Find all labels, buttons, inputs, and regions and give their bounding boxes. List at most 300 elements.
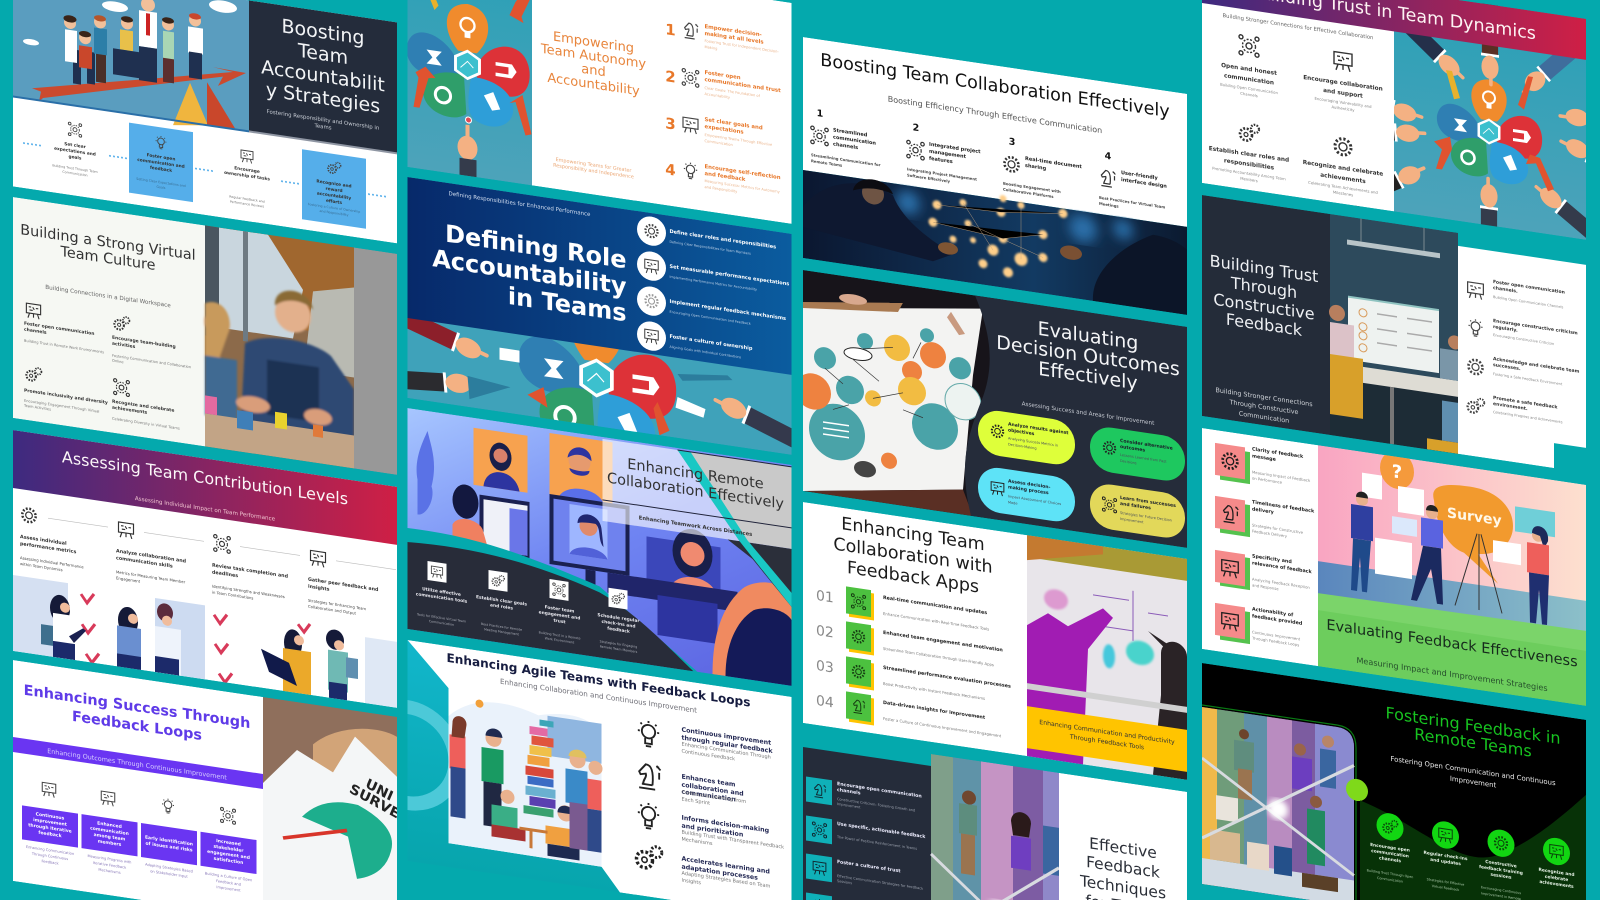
benefit list: Accelerates learning and bbox=[682, 856, 770, 876]
dark title panel bbox=[249, 0, 397, 153]
benefit cards: engagement and bbox=[207, 849, 250, 861]
numbered items: Best Practices for Virtual Team bbox=[1099, 195, 1165, 210]
timeline steps: in Team Contributions bbox=[212, 589, 253, 601]
heading: Team Culture bbox=[60, 244, 156, 274]
heading: Enhancing Success Through bbox=[24, 683, 250, 732]
benefit cards: Feedback bbox=[41, 859, 59, 866]
numbered list: Boost Productivity with Instant Feedback Mechanisms bbox=[883, 681, 985, 701]
responsibility list: Foster a culture of ownership bbox=[670, 334, 753, 352]
subtitle: Improvement bbox=[1450, 775, 1496, 790]
2x2 items: Encouraging Vulnerability and bbox=[1314, 96, 1372, 109]
numbered list: Enhance Communication with Real-Time Feedback Tools bbox=[883, 611, 989, 632]
numbered list: Encourage self-reflection bbox=[704, 164, 781, 181]
right white panel bbox=[1458, 246, 1586, 473]
2x2 items: responsibilities bbox=[1224, 158, 1275, 172]
item list: Promote a safe feedback bbox=[1493, 395, 1558, 411]
strategy items: communication tools bbox=[416, 591, 468, 605]
panel: Boosting Team Collaboration Effectively bbox=[803, 37, 1187, 315]
timeline steps: Assessing Individual Performance bbox=[20, 555, 84, 570]
benefit cards: feedback bbox=[38, 830, 63, 839]
2x2 items: Authenticity bbox=[1331, 104, 1355, 113]
numbered list: 01 bbox=[816, 588, 834, 607]
strategy items: Establish clear goals bbox=[476, 594, 527, 608]
accent ball bbox=[1346, 777, 1368, 803]
subtitle: Responsibility and Independence bbox=[553, 163, 634, 180]
feature grid: Celebrating Diversity in Virtual Teams bbox=[112, 417, 180, 431]
subtitle: Fostering Open Communication and Continuous bbox=[1390, 755, 1556, 787]
numbered items: 2 bbox=[913, 122, 919, 134]
feature list: Actionability of bbox=[1252, 606, 1294, 619]
feedback circles: Encouraging Continuous bbox=[1481, 885, 1521, 895]
numbered list: Streamlined performance evaluation processes bbox=[883, 665, 1011, 690]
heading: Collaboration Effectively bbox=[607, 470, 784, 513]
subtitle band bbox=[13, 737, 263, 789]
benefit cards: Enhancing Communication bbox=[26, 845, 74, 856]
feedback circles: communication bbox=[1371, 848, 1409, 860]
numbered list bbox=[665, 18, 781, 200]
benefit cards: Measuring Progress with bbox=[88, 854, 131, 865]
item list: successes. bbox=[1493, 363, 1521, 372]
responsibility list: Implement regular feedback mechanisms bbox=[670, 299, 786, 322]
outcome pills: Analyze results against bbox=[1008, 421, 1069, 436]
2x2 items: Open and honest bbox=[1221, 63, 1277, 77]
item list: regularly. bbox=[1493, 324, 1518, 334]
heading: Constructive bbox=[1213, 290, 1315, 324]
heading: Effective bbox=[1089, 834, 1157, 862]
process steps: Set clear bbox=[64, 141, 87, 150]
process steps: Communication bbox=[62, 170, 88, 178]
feedback circles: channels bbox=[1379, 855, 1401, 864]
benefit list: and prioritization bbox=[682, 823, 744, 839]
image: glowing network bbox=[803, 166, 1187, 315]
feature list: delivery bbox=[1252, 506, 1275, 516]
feedback circles: Building Trust Through Open bbox=[1367, 868, 1413, 879]
numbered list: 04 bbox=[816, 693, 834, 712]
right dark corner bbox=[728, 539, 792, 607]
benefit cards: Continuous bbox=[36, 811, 65, 822]
process steps: Performance Reviews bbox=[230, 200, 264, 209]
panel: Building Trust in Team Dynamics bbox=[1202, 0, 1600, 284]
numbered items: Streamlined bbox=[833, 127, 868, 139]
feature list: relevance of feedback bbox=[1252, 560, 1313, 575]
image: whiteboard silhouettes bbox=[1027, 535, 1187, 780]
feature grid bbox=[23, 302, 191, 432]
subtitle: Measuring Impact and Improvement Strategies bbox=[1356, 655, 1548, 693]
illustration: survey team: Survey bbox=[1447, 505, 1502, 529]
panel: Enhancing Team Collaboration with Feedback Apps bbox=[803, 502, 1187, 780]
benefit cards: among team bbox=[94, 832, 126, 843]
2x2 items: communication bbox=[1224, 73, 1274, 87]
benefit cards: members bbox=[98, 839, 122, 848]
numbered items: 1 bbox=[817, 108, 823, 120]
dark title panel bbox=[1202, 195, 1330, 435]
feature grid: Encouraging Engagement Through Virtual bbox=[24, 399, 99, 414]
feedback circles: and updates bbox=[1430, 857, 1461, 867]
outcome pills: Consider alternative bbox=[1120, 438, 1173, 452]
header band bbox=[13, 430, 397, 545]
timeline steps: Strategies for Enhancing Team bbox=[308, 598, 366, 611]
teal backdrop with ring bbox=[360, 633, 792, 900]
timeline steps: within Team Dynamics bbox=[20, 561, 63, 572]
strategy items: check-ins and bbox=[601, 619, 636, 630]
illustration: video call bbox=[408, 408, 792, 686]
numbered items: Remote Teams bbox=[811, 158, 843, 168]
numbered items: 3 bbox=[1009, 136, 1015, 148]
feature list bbox=[1215, 441, 1315, 654]
heading: Boosting bbox=[282, 14, 364, 49]
feedback circles: celebrate bbox=[1545, 874, 1568, 883]
heading: Collaboration with bbox=[833, 535, 993, 578]
teal swoosh bbox=[408, 528, 698, 672]
white panel bbox=[532, 0, 792, 224]
heading: Building Trust bbox=[1210, 251, 1318, 286]
process steps: Building Trust Through Team bbox=[52, 163, 98, 174]
timeline steps: Assess individual bbox=[20, 534, 67, 547]
feature list: Analyzing Feedback Reception bbox=[1252, 576, 1310, 590]
benefit cards: Improvement bbox=[216, 885, 241, 893]
responsibility list: Encouraging Open Communication and Feedback bbox=[670, 310, 751, 326]
item list: Acknowledge and celebrate team bbox=[1493, 356, 1580, 375]
technique list: Improvement bbox=[837, 802, 861, 810]
technique list: The Power of Positive Reinforcement in Teams bbox=[836, 835, 917, 851]
benefit cards: Mechanisms bbox=[98, 868, 121, 875]
heading: in Teams bbox=[508, 282, 627, 327]
subtitle: Communication bbox=[1239, 409, 1289, 425]
benefit cards: communication bbox=[90, 825, 129, 837]
benefit cards: on Stakeholder Input bbox=[150, 869, 188, 879]
numbered list: Accountability bbox=[704, 92, 731, 100]
benefit list: Mechanisms bbox=[682, 837, 713, 847]
timeline steps: Gather peer feedback and bbox=[308, 577, 379, 593]
benefit list: Adapting Strategies Based on Team bbox=[682, 871, 771, 890]
image: flower and hands bbox=[408, 177, 792, 455]
feature list: Strategies for Constructive bbox=[1252, 522, 1304, 535]
feature list: Feedback Delivery bbox=[1252, 528, 1288, 539]
process steps: accountability bbox=[317, 190, 351, 202]
numbered list: 02 bbox=[816, 623, 834, 642]
subtitle: Building Stronger Connections for Effective Collaboration bbox=[1223, 13, 1373, 41]
benefit list: Continuous improvement bbox=[682, 727, 771, 747]
feedback circles: achievements bbox=[1539, 879, 1574, 890]
technique list: Sessions bbox=[837, 879, 852, 885]
panel: Building Trust Through Constructive Feedback bbox=[1202, 195, 1586, 473]
strategy items: Strategies for Engaging bbox=[600, 639, 637, 649]
process steps: goals bbox=[69, 154, 82, 162]
feature list: message bbox=[1252, 454, 1277, 463]
technique list: Constructive Criticism: Fostering Growth and bbox=[837, 797, 915, 813]
numbered items: sharing bbox=[1025, 163, 1047, 172]
process steps bbox=[23, 122, 386, 217]
2x2 items: Encourage collaboration bbox=[1303, 75, 1383, 93]
feedback circles: Virtual Feedback bbox=[1432, 884, 1459, 892]
numbered items: channels bbox=[833, 141, 858, 151]
feedback circles: sessions bbox=[1490, 872, 1512, 881]
numbered list: 03 bbox=[816, 658, 834, 677]
dark panel bbox=[965, 294, 1187, 548]
heading: Building a Strong Virtual bbox=[20, 222, 196, 264]
numbered items: Meetings bbox=[1099, 201, 1119, 209]
benefit list: Continuous Feedback bbox=[682, 749, 735, 762]
panel: Defining Role Accountability in Teams bbox=[408, 177, 792, 455]
process steps: feedback bbox=[150, 165, 172, 174]
item list: Encouraging Constructive Criticism bbox=[1493, 333, 1555, 346]
image: survey document bbox=[263, 697, 407, 900]
strategy items: Foster team bbox=[545, 604, 575, 615]
heading: Team bbox=[297, 39, 348, 69]
timeline steps: Engagement bbox=[116, 575, 141, 584]
benefit cards: Feedback and bbox=[216, 879, 241, 887]
outcome pills: Improvement bbox=[1120, 517, 1144, 524]
highlight boxes bbox=[129, 123, 366, 229]
numbered list: Clear Goals: The Foundation of bbox=[704, 86, 761, 98]
strategy items: Best Practices for Remote bbox=[481, 622, 522, 632]
feature list: Measuring Impact of Feedback bbox=[1252, 469, 1311, 483]
heading: Through bbox=[1230, 273, 1297, 302]
process steps: Goals bbox=[157, 185, 166, 190]
strategy items: Building Trust in a Remote bbox=[539, 630, 580, 641]
process steps: efforts bbox=[326, 198, 342, 206]
outcome pills: Impact Assessment of Choices bbox=[1008, 494, 1061, 506]
feedback circles: Recognize and bbox=[1539, 867, 1574, 878]
process steps: ownership of tasks bbox=[224, 170, 270, 183]
feedback circles: Strategies for Effective bbox=[1427, 877, 1464, 887]
2x2 items: Celebrating Team Achievements and bbox=[1308, 180, 1378, 195]
item list: environment. bbox=[1493, 401, 1528, 412]
heading: Evaluating Feedback Effectiveness bbox=[1326, 616, 1578, 671]
numbered list: Enhanced team engagement and motivation bbox=[883, 630, 1003, 654]
responsibility list: Defining Clear Responsibilities for Team Members bbox=[670, 240, 751, 256]
benefit list: adaptation processes bbox=[682, 864, 758, 882]
strategy items: and roles bbox=[490, 602, 513, 612]
subtitle: Teams bbox=[313, 123, 332, 132]
timeline steps: Metrics for Measuring Team Member bbox=[116, 569, 186, 585]
heading: Effectively bbox=[1038, 357, 1138, 395]
dark list panel bbox=[803, 747, 931, 900]
heading: Feedback bbox=[1086, 853, 1160, 882]
grey strip bbox=[354, 247, 397, 475]
outcome pills: Assess decision- bbox=[1008, 478, 1051, 491]
numbered list: expectations bbox=[704, 124, 744, 136]
panel: Enhancing Agile Teams with Feedback Loops bbox=[360, 633, 792, 900]
strategy items: Schedule regular bbox=[597, 612, 640, 624]
benefit list bbox=[636, 719, 784, 899]
heading: Feedback Apps bbox=[847, 558, 979, 598]
feature list: Continuous Improvement bbox=[1252, 629, 1301, 642]
subtitle: Boosting Efficiency Through Effective Communication bbox=[888, 95, 1102, 135]
process steps: Regular Feedback and bbox=[229, 195, 265, 204]
numbered items: management bbox=[929, 149, 967, 160]
subtitle: Enhancing Teamwork Across Distances bbox=[639, 515, 752, 538]
benefit list: communication bbox=[682, 789, 736, 804]
timeline steps: insights bbox=[308, 584, 330, 593]
feature grid: Promote inclusivity and diversity bbox=[24, 388, 108, 406]
subtitle: Empowering Teams for Greater bbox=[556, 157, 632, 174]
feature list: feedback provided bbox=[1252, 613, 1303, 627]
numbered list: 2 bbox=[665, 67, 676, 87]
numbered list: Fostering Trust for Independent Decision- bbox=[704, 39, 779, 54]
numbered list: Foster a Culture of Continuous Improvement and Engagement bbox=[883, 716, 1002, 738]
blue header panel bbox=[408, 177, 792, 375]
image: colorful team on ropes bbox=[1202, 707, 1354, 900]
numbered list: 1 bbox=[665, 20, 676, 40]
panel: Enhancing Remote Collaboration Effectively bbox=[408, 408, 792, 686]
benefit list: Enhancing Communication Through bbox=[682, 742, 771, 761]
panel: Evaluating Feedback Effectiveness bbox=[1202, 422, 1586, 706]
numbered list: Measuring Success: Metrics for Autonomy bbox=[704, 179, 781, 194]
outcome pills: objectives bbox=[1008, 427, 1035, 437]
2x2 items: Members bbox=[1240, 176, 1258, 183]
subtitle: Assessing Individual Impact on Team Performance bbox=[135, 496, 276, 523]
panel: Effective Feedback Techniques for Teams bbox=[803, 735, 1187, 900]
heading: Feedback bbox=[1226, 310, 1303, 340]
outcome pills: Learn from successes bbox=[1120, 495, 1176, 509]
numbered list: Real-time communication and updates bbox=[883, 595, 987, 616]
responsibility list: Define clear roles and responsibilities bbox=[670, 229, 776, 251]
heading: Fostering Feedback in bbox=[1385, 703, 1561, 748]
green band bbox=[1318, 591, 1586, 706]
2x2 items: and support bbox=[1323, 88, 1363, 100]
heading: Accountability bbox=[547, 71, 640, 99]
feedback circles: Communication bbox=[1377, 876, 1403, 884]
image: survey document: UNI bbox=[363, 776, 395, 805]
responsibility list: Implementing Performance Metrics for Accountability bbox=[670, 275, 757, 292]
benefit list: Continuous Learning from bbox=[682, 790, 746, 805]
panel: Assessing Team Contribution Levels bbox=[13, 430, 397, 708]
2x2 items: Recognize and celebrate bbox=[1303, 160, 1383, 178]
subtitle: Defining Responsibilities for Enhanced Performance bbox=[449, 191, 591, 218]
numbered list: and feedback bbox=[704, 171, 746, 183]
timeline steps: Analyze collaboration and bbox=[116, 548, 187, 565]
process steps: Fostering a Culture of Ownership bbox=[308, 202, 360, 214]
feature grid: activities bbox=[112, 341, 136, 350]
item list: Building Open Communication Channels bbox=[1493, 295, 1563, 309]
heading: Accountability bbox=[432, 244, 627, 301]
responsibility list bbox=[637, 214, 789, 371]
heading: Empowering bbox=[553, 30, 634, 57]
heading: Remote Teams bbox=[1414, 725, 1532, 761]
benefit cards: satisfaction bbox=[214, 856, 243, 866]
panel: Empowering Team Autonomy and Accountability bbox=[407, 0, 792, 224]
numbered items: Integrating Project Management bbox=[907, 166, 977, 182]
feature grid: Team Activities bbox=[23, 403, 51, 412]
image: mind map on table bbox=[795, 269, 1003, 521]
benefit list: Building Trust with Transparent Feedback bbox=[682, 830, 784, 851]
yellow caption bar: Enhancing Communication and Productivity bbox=[1039, 719, 1175, 746]
feature list: on Performance bbox=[1252, 475, 1283, 485]
item list bbox=[1468, 275, 1580, 428]
feature list: Through Feedback Loops bbox=[1251, 635, 1299, 647]
benefit cards: improvement bbox=[33, 817, 68, 828]
outcome pills: Decisions bbox=[1120, 459, 1137, 465]
heading: Enhancing Agile Teams with Feedback Loops bbox=[447, 651, 750, 710]
image: flower and hands bbox=[1338, 0, 1600, 284]
outcome pills bbox=[978, 408, 1185, 541]
outcome pills: Decision-Making bbox=[1008, 442, 1037, 451]
numbered items: Software Effectively bbox=[907, 172, 951, 184]
process steps: and Responsibility bbox=[319, 209, 349, 217]
strategy items: Work Environment bbox=[545, 636, 575, 645]
outcome pills: Lessons Learned from Past bbox=[1120, 453, 1167, 464]
process steps: communication and bbox=[137, 157, 185, 170]
feature grid: Encourage team-building bbox=[112, 335, 176, 350]
benefit list: through regular feedback bbox=[682, 735, 773, 755]
process steps: Recognize and bbox=[316, 178, 352, 190]
timeline steps: deadlines bbox=[212, 569, 238, 579]
numbered list: making at all levels bbox=[704, 31, 764, 46]
illustration: survey team: ? bbox=[1392, 461, 1402, 484]
heading: Enhancing Remote bbox=[627, 456, 764, 493]
feature grid: achievements bbox=[112, 405, 148, 416]
process steps: Foster open bbox=[147, 152, 175, 163]
numbered list: Making bbox=[704, 45, 717, 51]
technique list bbox=[806, 776, 926, 900]
heading: Defining Role bbox=[445, 220, 627, 274]
yellow caption bar: Through Feedback Tools bbox=[1069, 733, 1144, 751]
numbered list: Data-driven insights for improvement bbox=[883, 700, 986, 721]
benefit cards bbox=[22, 777, 256, 895]
benefit list: Each Sprint bbox=[682, 797, 710, 807]
feedback circles: Constructive bbox=[1485, 859, 1517, 870]
benefit list: Enhances team bbox=[682, 774, 736, 789]
technique list: Effective Communication Strategies for Feedback bbox=[837, 874, 924, 891]
2x2 items: Milestones bbox=[1333, 189, 1353, 197]
white panel bbox=[408, 640, 792, 900]
timeline steps: performance metrics bbox=[20, 541, 76, 555]
strategy items: Remote Team Members bbox=[600, 644, 638, 654]
subtitle band: Enhancing Outcomes Through Continuous Improvement bbox=[47, 747, 227, 782]
2x2 items: Channels bbox=[1240, 91, 1258, 98]
2x2 items: Establish clear roles and bbox=[1209, 146, 1289, 164]
feature list: Timeliness of feedback bbox=[1252, 499, 1315, 515]
technique list: channels bbox=[837, 787, 861, 797]
dark green wave bbox=[1360, 761, 1586, 900]
subtitle: Fostering Responsibility and Ownership in bbox=[267, 109, 379, 132]
process steps: reward bbox=[325, 186, 343, 194]
strategy items: Utilize effective bbox=[422, 586, 461, 598]
benefit cards: Adapting Strategies Based bbox=[145, 863, 193, 874]
subtitle: Through Constructive bbox=[1229, 398, 1299, 416]
feature grid: Building Trust in Remote Work Environments bbox=[24, 339, 104, 354]
responsibility list: Set measurable performance expectations bbox=[670, 264, 789, 287]
benefit cards: Enhanced bbox=[97, 820, 122, 830]
benefit cards: Through Continuous bbox=[31, 852, 68, 861]
feature list: and Response bbox=[1252, 582, 1279, 591]
photo outline bbox=[1202, 705, 1356, 900]
image: colorful team on ropes bbox=[931, 754, 1059, 900]
numbered items: Streamlining Communication for bbox=[811, 152, 881, 167]
feature list: Clarity of feedback bbox=[1252, 446, 1304, 460]
timeline steps: communication skills bbox=[116, 555, 173, 570]
numbered list: communication and trust bbox=[704, 77, 781, 94]
image: survey document: SURVE bbox=[347, 781, 402, 822]
outcome pills: making process bbox=[1008, 484, 1049, 496]
header band bbox=[1202, 0, 1586, 60]
heading: Assessing Team Contribution Levels bbox=[62, 447, 348, 509]
numbered list: 4 bbox=[665, 160, 676, 180]
heading: Feedback Loops bbox=[72, 709, 202, 744]
2x2 items: Building Open Communication bbox=[1220, 82, 1278, 95]
timeline steps bbox=[20, 506, 396, 622]
2x2 items: Promoting Accountability Among Team bbox=[1212, 166, 1286, 181]
benefit list: collaboration and bbox=[682, 782, 744, 798]
numbered list: 3 bbox=[665, 114, 676, 134]
numbered items: interface design bbox=[1121, 177, 1167, 190]
benefit cards: Early identification bbox=[145, 835, 193, 848]
item list: Foster open communication bbox=[1493, 279, 1565, 296]
heading: Team Autonomy bbox=[540, 42, 646, 72]
strategy items: trust bbox=[553, 618, 566, 625]
outcome pills: outcomes bbox=[1120, 444, 1145, 454]
